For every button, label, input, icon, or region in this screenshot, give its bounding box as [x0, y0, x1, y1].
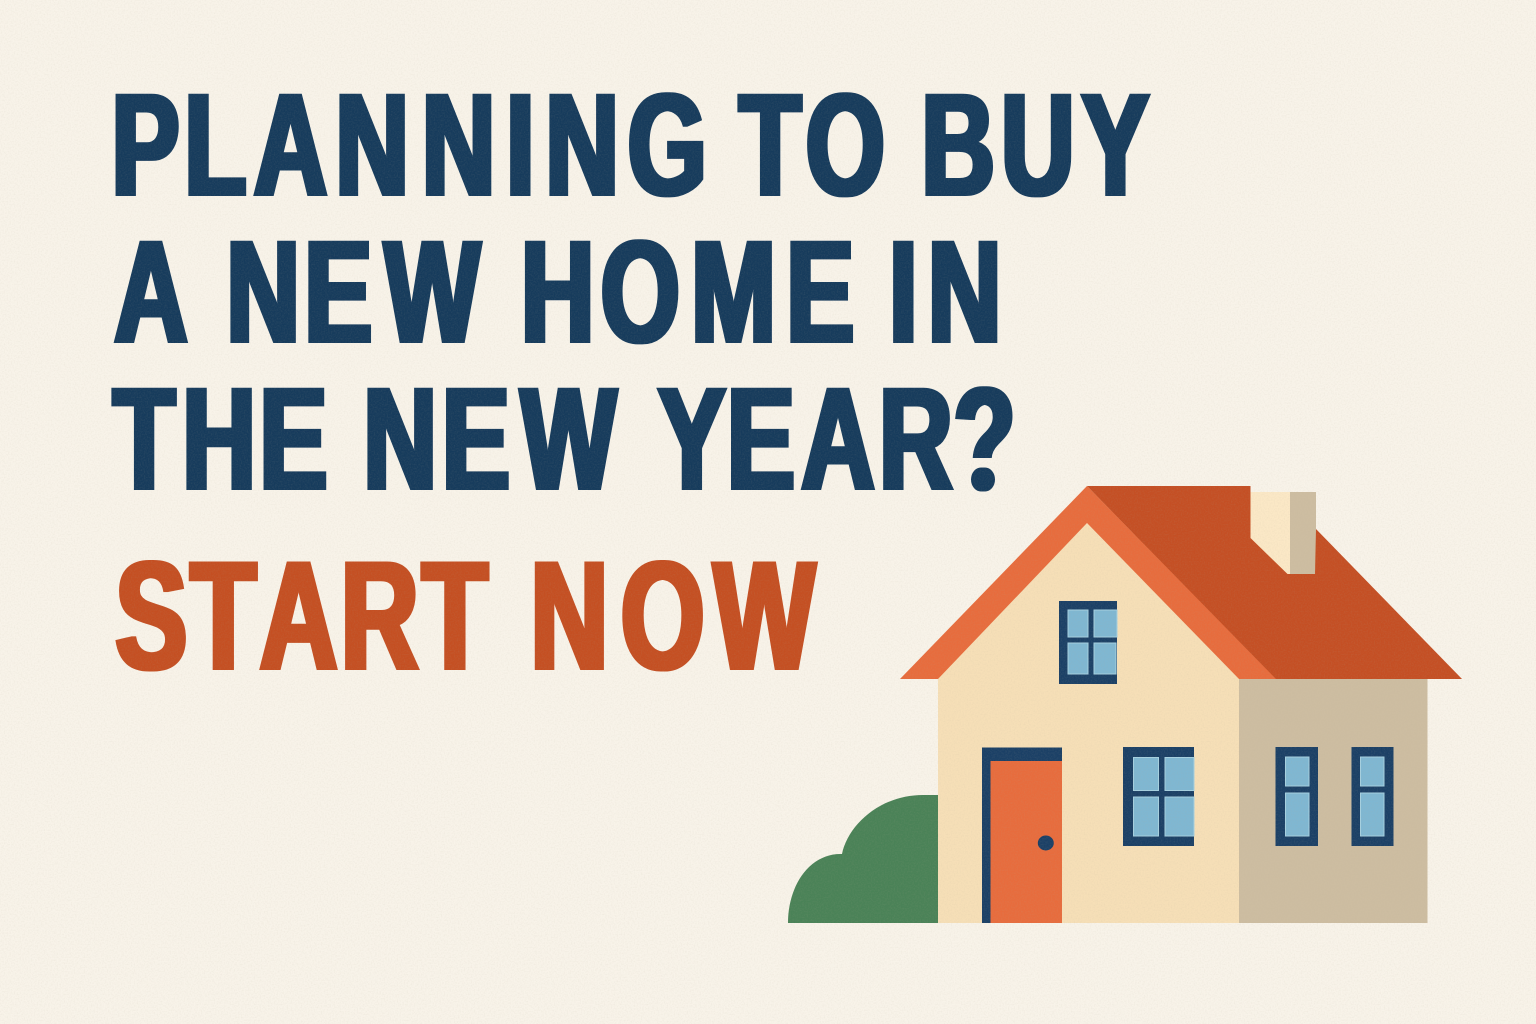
side window right	[1352, 747, 1394, 846]
roof front gable trim	[900, 486, 1276, 679]
house side wall	[1239, 678, 1428, 923]
title: planning to buy a new home in the new year: NEW	[227, 211, 480, 373]
chimney	[1250, 492, 1316, 574]
front door	[982, 748, 1062, 923]
title: planning to buy a new home in the new year: NEW	[364, 358, 616, 520]
title: planning to buy a new home in the new year: BUY	[921, 64, 1149, 226]
title: planning to buy a new home in the new year: PLANNING	[112, 64, 707, 226]
roof side panel	[1087, 486, 1462, 679]
call to action: start now: START	[115, 531, 488, 702]
icon: green bush	[788, 795, 938, 923]
call to action: start now: NOW	[530, 531, 816, 702]
upper window	[1059, 601, 1117, 684]
side window left	[1276, 747, 1318, 846]
title: planning to buy a new home in the new year: YEAR?	[658, 358, 1015, 520]
title: planning to buy a new home in the new year: A	[114, 211, 188, 373]
title: planning to buy a new home in the new year	[111, 92, 1152, 492]
title: planning to buy a new home in the new year: TO	[739, 64, 885, 226]
title: planning to buy a new home in the new year: HOME	[521, 211, 854, 373]
title: planning to buy a new home in the new year: IN	[889, 211, 1001, 373]
front window	[1123, 747, 1194, 846]
illustration: house with bush	[788, 486, 1462, 923]
call to action: start now	[115, 531, 816, 702]
house front wall	[938, 523, 1239, 923]
door knob	[1038, 836, 1054, 850]
title: planning to buy a new home in the new year: THE	[113, 358, 327, 520]
